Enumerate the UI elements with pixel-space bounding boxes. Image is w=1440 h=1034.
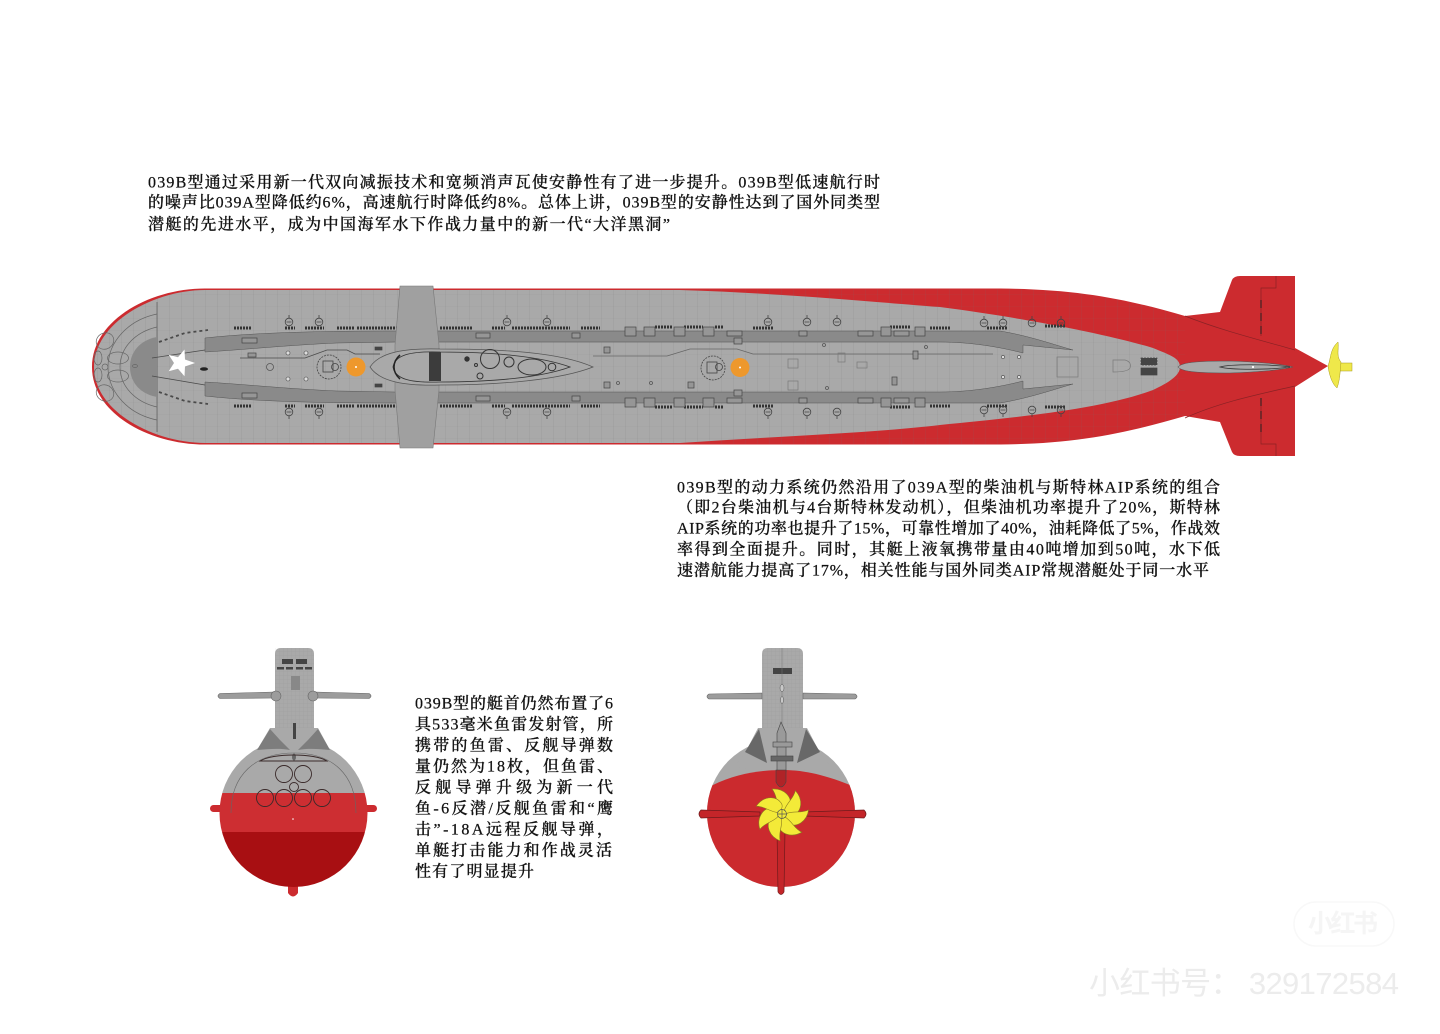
sail — [275, 648, 314, 730]
watermark logo: 小红书 — [1308, 910, 1378, 938]
orange hatch aft — [730, 358, 750, 377]
collar shadows — [735, 728, 830, 770]
round deck fittings — [266, 315, 1065, 419]
text block: acoustic stealth: 潜艇的先进水平，成为中国海军水下作战力量中的新一代“大洋黑洞” — [148, 216, 670, 234]
text block: weapons: 携带的鱼雷、反舰导弹数 — [415, 736, 613, 754]
diving planes — [218, 691, 371, 701]
text block: weapons: 具533毫米鱼雷发射管，所 — [415, 714, 613, 734]
hull disc: grey top, red below — [707, 746, 855, 887]
hull: red lower body with tail fins — [92, 276, 1328, 456]
aft hatch — [701, 356, 725, 380]
text block: weapons: 量仍然为18枚，但鱼雷、 — [415, 758, 613, 776]
forward hatch — [317, 355, 341, 379]
cruciform stern planes — [699, 810, 866, 894]
rudder control lines — [1185, 276, 1295, 456]
bow front view — [210, 648, 377, 896]
text block: weapons: 性有了明显提升 — [415, 862, 534, 880]
hull: grey upper deck — [94, 290, 1180, 443]
casing bands — [205, 331, 1073, 403]
text block: propulsion system: 速潜航能力提高了17%，相关性能与国外同类AIP常规潜艇处于同一水平 — [677, 560, 1209, 580]
sail planes — [395, 286, 439, 448]
submarine top-down plan view — [92, 276, 1352, 456]
hull disc with grey, red and dark red sections — [220, 748, 368, 887]
diving planes — [707, 693, 857, 699]
text block: propulsion system: AIP系统的功率也提升了15%，可靠性增加了40%，油耗降低了5%，作战效 — [677, 518, 1220, 538]
text block: acoustic stealth: 039B型通过采用新一代双向减振技术和宽频消声瓦使安静性有了进一步提升。039B型低速航行时 — [148, 172, 880, 192]
text block: weapons: 击”-18A远程反舰导弹， — [415, 820, 613, 838]
sail — [762, 648, 803, 730]
stern rear view — [699, 648, 866, 895]
text block: acoustic stealth — [148, 172, 880, 234]
grid overlay — [94, 289, 1185, 444]
text block: weapons: 单艇打击能力和作战灵活 — [415, 842, 612, 860]
propeller side view — [1328, 342, 1352, 388]
dorsal rudder — [771, 722, 793, 787]
deck hatch boxes — [242, 327, 1157, 407]
collar — [252, 723, 335, 760]
sail windows — [277, 659, 312, 670]
watermark id: 小红书号： 329172584 — [1089, 966, 1399, 1001]
text block: weapons: 反舰导弹升级为新一代 — [415, 778, 613, 796]
orange hatch forward — [346, 358, 366, 376]
text block: propulsion system: （即2台柴油机与4台斯特林发动机），但柴油机功率提升了20%，斯特林 — [677, 498, 1220, 516]
text block: propulsion system — [677, 478, 1220, 580]
star insignia — [169, 350, 195, 376]
bow section arcs — [93, 302, 157, 432]
hull fins — [210, 805, 377, 896]
text block: acoustic stealth: 的噪声比039A型降低约6%，高速航行时降低约8%。总体上讲，039B型的安静性达到了国外同类型 — [148, 192, 880, 212]
seven-blade propeller — [756, 789, 809, 841]
watermark logo — [1294, 902, 1394, 946]
sail top view — [370, 349, 593, 385]
text block: propulsion system: 率得到全面提升。同时，其艇上液氧携带量由40吨增加到50吨，水下低 — [677, 540, 1220, 558]
text block: propulsion system: 039B型的动力系统仍然沿用了039A型的柴油机与斯特林AIP系统的组合 — [677, 478, 1220, 496]
text block: weapons: 039B型的艇首仍然布置了6 — [415, 694, 613, 712]
torpedo tubes — [231, 753, 356, 813]
text block: weapons: 鱼-6反潜/反舰鱼雷和“鹰 — [415, 800, 613, 818]
centreline rails — [152, 330, 993, 404]
text block: weapons — [415, 694, 613, 880]
stern dorsal fin — [1178, 361, 1293, 373]
upper tick rows — [234, 326, 1065, 407]
